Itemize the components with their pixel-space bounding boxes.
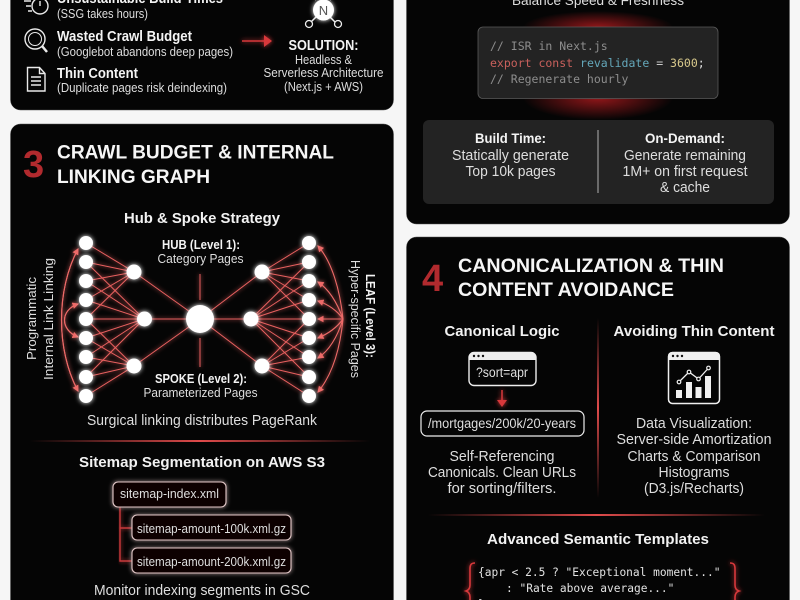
text: self-referencing canonicals: Canonicals. Clean URLs	[428, 465, 576, 481]
subheading: avoiding thin content: Avoiding Thin Content	[614, 323, 775, 340]
arrow: to solution	[242, 35, 272, 47]
diagram: sitemap tree: sitemap-index.xml	[120, 487, 219, 501]
panel: ISR strategy	[406, 0, 790, 224]
subheading: canonical logic: Canonical Logic	[444, 323, 560, 340]
label: spoke: SPOKE (Level 2):	[155, 372, 247, 386]
heading: crawl budget: LINKING GRAPH	[57, 166, 210, 188]
text: thin content: Thin Content	[57, 66, 138, 82]
diagram: sitemap tree: sitemap-amount-100k.xml.gz	[137, 522, 286, 536]
heading: canonicalization: CANONICALIZATION & THIN	[458, 255, 724, 277]
panel: canonicalization and thin content	[406, 237, 790, 600]
text: solution: Serverless Architecture	[264, 66, 384, 80]
text: on-demand	[622, 131, 748, 196]
url box: canonical URL: /mortgages/200k/20-years	[428, 416, 576, 431]
icon: document	[28, 68, 45, 91]
text: solution: Headless &	[295, 53, 353, 67]
code block: ISR snippet: export const revalidate = 3600;	[490, 56, 705, 70]
heading: canonicalization	[458, 255, 724, 301]
text: on-demand: On-Demand:	[645, 131, 725, 146]
text: on-demand: & cache	[660, 180, 710, 196]
panel: crawl budget and internal linking graph	[10, 124, 394, 600]
icon: Next.js node: N	[319, 3, 328, 18]
text: wasted crawl budget	[57, 29, 233, 59]
code block: ISR snippet: // Regenerate hourly	[490, 72, 629, 86]
text: self-referencing canonicals: for sorting/filters.	[448, 481, 556, 497]
text: solution: SOLUTION:	[288, 38, 358, 54]
text: data visualization: Data Visualization:	[636, 416, 752, 432]
heading: canonicalization: CONTENT AVOIDANCE	[458, 279, 674, 301]
text: unsustainable build times	[57, 0, 223, 21]
label: programmatic internal linking	[25, 258, 56, 380]
subheading: hub and spoke: Hub & Spoke Strategy	[124, 210, 281, 227]
label: programmatic internal linking: Internal Link Linking	[42, 258, 56, 380]
label: spoke: Parameterized Pages	[144, 386, 258, 400]
glow: behind code block	[523, 11, 673, 120]
text: self-referencing canonicals	[428, 449, 576, 497]
text: solution: (Next.js + AWS)	[284, 80, 363, 94]
icon: build clock	[24, 0, 48, 14]
text: self-referencing canonicals: Self-Referencing	[450, 449, 554, 465]
arrow: canonical redirect	[497, 390, 507, 407]
icon: browser with query parameter: ?sort=apr	[476, 365, 528, 380]
caption: monitor indexing: Monitor indexing segments in GSC	[94, 583, 310, 599]
number 4: 4	[422, 258, 443, 300]
label: leaf: LEAF (Level 3):	[363, 274, 377, 358]
panel: architecture problems and solution	[10, 0, 394, 110]
code: semantic template	[466, 563, 739, 600]
code: semantic template: : "Rate above average..."	[506, 582, 674, 595]
text: wasted crawl budget: Wasted Crawl Budget	[57, 29, 192, 45]
text: data visualization	[616, 416, 772, 497]
text: on-demand: Generate remaining	[624, 148, 746, 164]
label: hub	[158, 238, 244, 266]
text: build time	[452, 131, 569, 180]
icon: chart in browser	[668, 352, 720, 404]
label: leaf	[348, 260, 377, 378]
text: wasted crawl budget: (Googlebot abandons deep pages)	[57, 45, 233, 59]
heading: crawl budget	[57, 142, 334, 188]
heading: crawl budget: CRAWL BUDGET & INTERNAL	[57, 142, 334, 164]
code block: ISR snippet	[478, 27, 718, 98]
text: thin content	[57, 66, 227, 95]
label: programmatic internal linking: Programmatic	[25, 277, 39, 360]
text: data visualization: Histograms	[658, 465, 730, 481]
text: build time: Build Time:	[475, 131, 546, 146]
text: data visualization: Server-side Amortization	[616, 432, 772, 448]
subheading: advanced semantic templates: Advanced Semantic Templates	[487, 531, 709, 548]
text: on-demand: 1M+ on first request	[622, 164, 748, 180]
diagram: sitemap tree	[113, 482, 291, 573]
number 3: 3	[23, 144, 44, 186]
caption: surgical linking: Surgical linking distributes PageRank	[87, 413, 318, 429]
subheading: sitemap segmentation: Sitemap Segmentation on AWS S3	[79, 454, 325, 471]
icon: crawl magnifier	[25, 29, 47, 52]
label: leaf: Hyper-specific Pages	[348, 260, 362, 378]
text: data visualization: Charts & Comparison	[628, 449, 760, 465]
panel: build time vs on-demand	[423, 120, 774, 204]
code block: ISR snippet: // ISR in Next.js	[490, 39, 608, 53]
diagram: sitemap tree: sitemap-amount-200k.xml.gz	[137, 555, 286, 569]
code: semantic template: {apr < 2.5 ? "Exceptional moment..."	[478, 566, 720, 579]
text: build time: Statically generate	[452, 148, 569, 164]
text: unsustainable build times: (SSG takes hours)	[57, 7, 148, 21]
text: solution	[264, 38, 384, 94]
chart: hub and spoke network	[62, 236, 343, 403]
text: build time: Top 10k pages	[466, 164, 556, 180]
label: hub: HUB (Level 1):	[162, 238, 240, 252]
text: thin content: (Duplicate pages risk deindexing)	[57, 81, 227, 95]
label: spoke	[144, 372, 258, 400]
icon: browser with query parameter	[469, 352, 536, 386]
url box: canonical URL	[421, 411, 584, 436]
label: hub: Category Pages	[158, 252, 244, 266]
text: data visualization: (D3.js/Recharts)	[644, 481, 744, 497]
icon: Next.js node	[306, 0, 342, 28]
